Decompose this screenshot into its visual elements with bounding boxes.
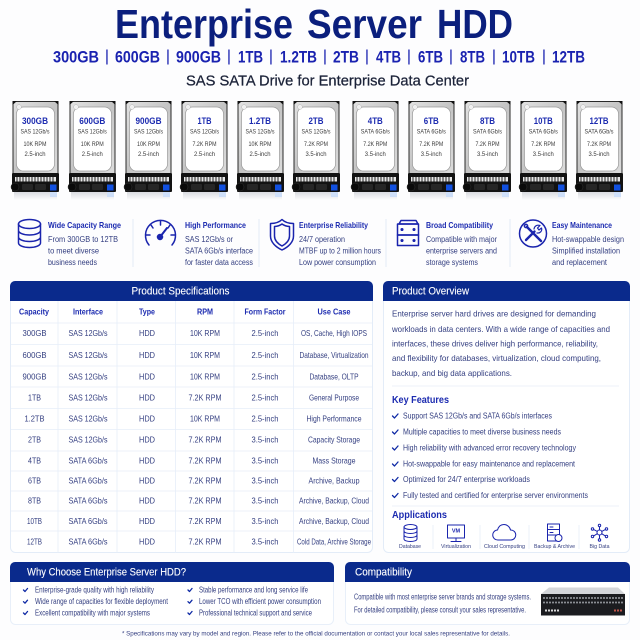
row: 2TB: Capacity Storage bbox=[308, 436, 360, 444]
table column headings: Type bbox=[139, 308, 155, 316]
why choose bullets: Professional technical support and service bbox=[199, 608, 312, 618]
app: virtualization: VM bbox=[452, 528, 461, 534]
row: 4TB: Mass Storage bbox=[312, 456, 356, 466]
drive: 4TB: 3.5-inch bbox=[365, 152, 386, 158]
overview paragraph bbox=[391, 309, 610, 378]
why choose bullets: Excellent compatibility with major systems bbox=[35, 608, 150, 618]
capacity range line: 12TB bbox=[552, 48, 585, 66]
drive: 300GB: 2.5-inch bbox=[24, 152, 46, 158]
drive: 1TB: SAS 12Gb/s bbox=[190, 130, 219, 136]
drive: 10TB bbox=[519, 101, 567, 200]
drive: 10TB: 7.2K RPM bbox=[531, 142, 555, 148]
overview paragraph: backup, and big data applications. bbox=[392, 368, 512, 378]
row: 2TB: SAS 12Gb/s bbox=[68, 436, 108, 444]
app: big data: Big Data bbox=[590, 544, 610, 550]
row: 1TB bbox=[28, 394, 359, 402]
drive: 4TB: SATA 6Gb/s bbox=[361, 130, 390, 136]
row: 600GB: HDD bbox=[139, 351, 155, 360]
drive: 12TB bbox=[575, 101, 623, 200]
row: 10TB: 7.2K RPM bbox=[188, 517, 222, 526]
drive: 12TB: 7.2K RPM bbox=[587, 142, 611, 148]
row: 300GB: 2.5-inch bbox=[252, 329, 279, 338]
drive: 2TB: 2TB bbox=[308, 115, 324, 126]
why choose bullets bbox=[24, 586, 321, 618]
capacity range line: 300GB bbox=[53, 48, 99, 66]
row: 900GB: 900GB bbox=[22, 372, 47, 382]
capacity range line: | bbox=[105, 48, 109, 65]
drive: 6TB: 7.2K RPM bbox=[419, 142, 443, 148]
drive: 6TB: 6TB bbox=[424, 115, 439, 126]
table column headings: Capacity bbox=[19, 308, 49, 316]
row: 4TB: 7.2K RPM bbox=[188, 456, 222, 466]
key features list: Support SAS 12Gb/s and SATA 6Gb/s interfaces bbox=[403, 412, 552, 420]
capacity range line: 1.2TB bbox=[280, 48, 317, 66]
feature: enterprise reliability: Enterprise Reliability bbox=[299, 220, 368, 230]
key features heading: Key Features bbox=[392, 394, 449, 406]
drive: 1.2TB: 1.2TB bbox=[249, 115, 271, 126]
drive: 4TB: 7.2K RPM bbox=[363, 142, 387, 148]
row: 1TB: 1TB bbox=[28, 394, 41, 402]
feature: wide capacity range: From 300GB to 12TB bbox=[48, 235, 118, 244]
row: 1.2TB: 1.2TB bbox=[24, 414, 45, 424]
row: 900GB: 2.5-inch bbox=[252, 372, 279, 382]
drive: 4TB bbox=[351, 101, 399, 200]
row: 900GB: 10K RPM bbox=[190, 372, 220, 382]
feature: broad compatibility bbox=[398, 220, 497, 267]
row: 1.2TB: 2.5-inch bbox=[252, 414, 279, 424]
row: 8TB: 7.2K RPM bbox=[188, 496, 222, 506]
drive: 4TB: 4TB bbox=[368, 115, 383, 126]
feature: high performance: High Performance bbox=[185, 220, 246, 230]
app: virtualization: Virtualization bbox=[441, 544, 471, 550]
row: 6TB: 6TB bbox=[28, 476, 41, 486]
row: 12TB: 3.5-inch bbox=[252, 538, 279, 546]
compatibility header bar bbox=[345, 562, 630, 582]
drive: 10TB: SATA 6Gb/s bbox=[529, 130, 558, 136]
why choose heading: Why Choose Enterprise Server HDD? bbox=[27, 566, 186, 578]
icon: server stack bbox=[398, 220, 418, 246]
row: 10TB bbox=[27, 517, 369, 526]
row: 8TB: SATA 6Gb/s bbox=[68, 496, 108, 506]
drive: 6TB bbox=[407, 101, 455, 200]
title: HDD bbox=[437, 1, 513, 47]
key features list bbox=[392, 412, 588, 500]
capacity range line: 4TB bbox=[376, 48, 401, 66]
feature: broad compatibility: enterprise servers and bbox=[426, 246, 497, 256]
app: big data bbox=[590, 524, 610, 550]
feature: easy maintenance bbox=[520, 220, 624, 267]
row: 6TB: Archive, Backup bbox=[308, 476, 360, 486]
capacity range line: | bbox=[227, 48, 231, 65]
why choose bullets: Wide range of capacities for flexible deployment bbox=[35, 597, 169, 606]
row: 8TB: Archive, Backup, Cloud bbox=[299, 496, 369, 506]
overview paragraph: Enterprise server hard drives are designed for demanding bbox=[392, 309, 596, 319]
app: database: Database bbox=[399, 544, 421, 550]
app: cloud computing bbox=[484, 524, 525, 550]
overview paragraph: interfaces, these drives deliver high performance, reliability, bbox=[392, 338, 598, 348]
capacity range line: | bbox=[166, 48, 170, 65]
drive: 8TB: 7.2K RPM bbox=[476, 142, 500, 148]
feature: easy maintenance: Easy Maintenance bbox=[552, 220, 612, 230]
why choose bullets: Enterprise-grade quality with high reliability bbox=[35, 586, 154, 594]
drive: 900GB bbox=[124, 101, 172, 200]
capacity range line: 8TB bbox=[460, 48, 485, 66]
row: 1.2TB: SAS 12Gb/s bbox=[68, 414, 108, 424]
row: 2TB: 3.5-inch bbox=[252, 436, 279, 444]
row: 4TB: 4TB bbox=[28, 456, 41, 466]
drive: 1TB: 2.5-inch bbox=[194, 152, 215, 158]
feature: broad compatibility: Broad Compatibility bbox=[426, 220, 493, 230]
row: 10TB: 3.5-inch bbox=[252, 517, 279, 526]
drive row bbox=[11, 101, 623, 200]
row: 10TB: SATA 6Gb/s bbox=[68, 517, 108, 526]
drive: 1TB: 7.2K RPM bbox=[192, 142, 217, 148]
row: 900GB: Database, OLTP bbox=[310, 372, 359, 382]
table column headings: RPM bbox=[197, 308, 213, 316]
drive: 8TB: 3.5-inch bbox=[477, 152, 498, 158]
applications row bbox=[399, 524, 610, 550]
table heading: Product Specifications bbox=[132, 286, 230, 298]
capacity range line: 6TB bbox=[418, 48, 443, 66]
app: backup and archive bbox=[534, 524, 575, 550]
row: 1TB: 2.5-inch bbox=[252, 394, 279, 402]
row: 600GB: Database, Virtualization bbox=[300, 351, 369, 360]
feature: enterprise reliability: MTBF up to 2 million hours bbox=[299, 246, 381, 256]
row: 1.2TB: High Performance bbox=[306, 414, 362, 424]
drive: 2TB bbox=[292, 101, 340, 200]
app: database bbox=[399, 524, 421, 550]
compatibility heading: Compatibility bbox=[355, 566, 412, 578]
feature: high performance bbox=[146, 220, 253, 267]
key features list: Multiple capacities to meet diverse business needs bbox=[403, 428, 561, 436]
app: cloud computing: Cloud Computing bbox=[484, 544, 525, 550]
capacity range line: | bbox=[365, 48, 369, 65]
table column headings: Form Factor bbox=[244, 308, 286, 316]
row: 300GB: SAS 12Gb/s bbox=[68, 329, 108, 338]
row: 10TB: 10TB bbox=[27, 517, 42, 526]
row: 4TB bbox=[28, 456, 356, 466]
drive: 1.2TB bbox=[236, 101, 284, 200]
drive: 900GB: 10K RPM bbox=[137, 142, 160, 148]
drive: 6TB: 3.5-inch bbox=[421, 152, 442, 158]
row: 1TB: SAS 12Gb/s bbox=[68, 394, 108, 402]
capacity range line: 1TB bbox=[238, 48, 263, 66]
row: 1TB: HDD bbox=[139, 394, 155, 402]
row: 600GB: SAS 12Gb/s bbox=[68, 351, 108, 360]
table column headings bbox=[19, 308, 351, 316]
icon: tools bbox=[520, 220, 546, 247]
row: 10TB: HDD bbox=[139, 517, 155, 526]
key features list: Optimized for 24/7 enterprise workloads bbox=[403, 475, 530, 484]
subtitle: SAS SATA Drive for Enterprise Data Center bbox=[186, 72, 469, 90]
row: 6TB: 7.2K RPM bbox=[188, 476, 222, 486]
drive: 300GB bbox=[11, 101, 59, 200]
drive: 2TB: 7.2K RPM bbox=[304, 142, 328, 148]
row: 900GB: SAS 12Gb/s bbox=[68, 372, 108, 382]
table header bar bbox=[10, 281, 373, 301]
drive: 1.2TB: SAS 12Gb/s bbox=[246, 130, 274, 136]
row: 1.2TB: 10K RPM bbox=[190, 414, 220, 424]
row: 12TB: Cold Data, Archive Storage bbox=[297, 538, 371, 546]
row: 600GB bbox=[22, 351, 369, 360]
overview header bar bbox=[383, 281, 630, 301]
feature: easy maintenance: Simplified installation bbox=[552, 246, 620, 256]
row: 600GB: 10K RPM bbox=[190, 351, 220, 360]
drive: 300GB: 10K RPM bbox=[24, 142, 46, 148]
feature: high performance: for faster data access bbox=[185, 258, 253, 267]
capacity range line: 2TB bbox=[333, 48, 359, 66]
capacity range line: | bbox=[407, 48, 411, 65]
feature: broad compatibility: storage systems bbox=[426, 258, 478, 267]
drive: 600GB: SAS 12Gb/s bbox=[78, 130, 107, 136]
row: 300GB: HDD bbox=[139, 329, 155, 338]
feature: wide capacity range bbox=[18, 220, 121, 267]
feature: enterprise reliability bbox=[270, 220, 381, 267]
title: Server bbox=[307, 1, 422, 47]
row: 300GB: 300GB bbox=[22, 329, 47, 338]
feature: easy maintenance: Hot-swappable design bbox=[552, 235, 624, 244]
drive: 600GB: 600GB bbox=[79, 115, 105, 126]
panel: compatibility bbox=[345, 562, 630, 624]
row: 2TB: HDD bbox=[139, 436, 155, 444]
feature: broad compatibility: Compatible with major bbox=[426, 235, 497, 244]
row: 2TB: 2TB bbox=[28, 436, 41, 444]
row: 2TB: 7.2K RPM bbox=[188, 436, 222, 444]
row: 2TB bbox=[28, 436, 360, 444]
footnote: * Specifications may vary by model and region. Please refer to the official documentation or contact your local sales representative for details. bbox=[122, 630, 510, 638]
drive: 6TB: SATA 6Gb/s bbox=[417, 130, 446, 136]
row: 8TB bbox=[28, 496, 369, 506]
icon: shield bbox=[270, 220, 294, 250]
drive: 300GB: 300GB bbox=[22, 115, 48, 126]
drive: 600GB: 2.5-inch bbox=[82, 152, 103, 158]
key features list: High reliability with advanced error recovery technology bbox=[403, 444, 576, 452]
capacity range line: 900GB bbox=[176, 48, 221, 66]
row: 4TB: HDD bbox=[139, 456, 155, 466]
feature: high performance: SATA 6Gb/s interface bbox=[185, 246, 253, 256]
row: 10TB: Archive, Backup, Cloud bbox=[299, 517, 369, 526]
drive: 8TB: SATA 6Gb/s bbox=[473, 130, 502, 136]
key features list: Hot-swappable for easy maintenance and replacement bbox=[403, 460, 576, 468]
drive: 1.2TB: 10K RPM bbox=[248, 142, 272, 148]
overview paragraph: and flexibility for databases, virtualization, cloud computing, bbox=[392, 353, 601, 363]
row: 6TB: 3.5-inch bbox=[252, 476, 279, 486]
overview paragraph: workloads in data centers. With a wide range of capacities and bbox=[391, 324, 610, 334]
row: 900GB: HDD bbox=[139, 372, 155, 382]
row: 12TB: HDD bbox=[139, 538, 155, 546]
panel: why choose bbox=[10, 562, 334, 624]
row: 12TB: 7.2K RPM bbox=[188, 538, 222, 546]
row: 8TB: HDD bbox=[139, 496, 155, 506]
row: 600GB: 2.5-inch bbox=[252, 351, 279, 360]
drive: 300GB: SAS 12Gb/s bbox=[20, 130, 50, 136]
row: 6TB bbox=[28, 476, 360, 486]
row: 4TB: 3.5-inch bbox=[252, 456, 279, 466]
row: 8TB: 8TB bbox=[28, 496, 41, 506]
feature: wide capacity range: Wide Capacity Range bbox=[48, 220, 121, 230]
drive: 600GB: 10K RPM bbox=[81, 142, 104, 148]
table column headings: Use Case bbox=[318, 308, 351, 316]
panel: product specifications bbox=[10, 281, 373, 553]
feature: high performance: SAS 12Gb/s or bbox=[185, 235, 233, 244]
feature: wide capacity range: business needs bbox=[48, 258, 97, 267]
capacity range line: | bbox=[449, 48, 453, 65]
table column headings: Interface bbox=[73, 308, 103, 316]
app: backup and archive: Backup & Archive bbox=[534, 544, 575, 550]
row: 300GB bbox=[22, 329, 367, 338]
drive: 10TB: 10TB bbox=[534, 115, 553, 126]
feature: enterprise reliability: 24/7 operation bbox=[299, 235, 345, 244]
icon: rack server bbox=[541, 588, 625, 616]
row: 300GB: 10K RPM bbox=[190, 329, 220, 338]
title: Enterprise bbox=[115, 1, 293, 47]
capacity range line: | bbox=[492, 48, 496, 65]
feature strip bbox=[18, 219, 624, 267]
feature: enterprise reliability: Low power consumption bbox=[299, 258, 376, 267]
app: virtualization bbox=[441, 525, 471, 550]
row: 6TB: HDD bbox=[139, 476, 155, 486]
row: 1TB: General Purpose bbox=[309, 394, 359, 402]
feature: easy maintenance: and replacement bbox=[552, 258, 608, 267]
drive: 12TB: 3.5-inch bbox=[588, 152, 610, 158]
why choose header bar bbox=[10, 562, 334, 582]
row: 12TB: 12TB bbox=[27, 538, 42, 546]
capacity range line: 10TB bbox=[502, 48, 535, 66]
drive: 900GB: SAS 12Gb/s bbox=[134, 130, 163, 136]
drive: 2TB: SAS 12Gb/s bbox=[302, 130, 330, 136]
capacity range line: | bbox=[269, 48, 273, 65]
feature: wide capacity range: to meet diverse bbox=[48, 246, 99, 256]
compatibility text: Compatible with most enterprise server brands and storage systems. bbox=[354, 592, 531, 602]
row: 300GB: OS, Cache, High IOPS bbox=[301, 329, 367, 338]
capacity range line: | bbox=[323, 48, 327, 65]
drive: 12TB: SATA 6Gb/s bbox=[584, 130, 614, 136]
title bbox=[115, 1, 513, 47]
capacity range line: | bbox=[542, 48, 546, 65]
overview heading: Product Overview bbox=[392, 286, 469, 298]
row: 4TB: SATA 6Gb/s bbox=[68, 456, 108, 466]
drive: 8TB: 8TB bbox=[480, 115, 495, 126]
icon: gauge bbox=[146, 220, 176, 245]
row: 12TB bbox=[27, 538, 371, 546]
row: 12TB: SATA 6Gb/s bbox=[68, 538, 108, 546]
capacity range line: 600GB bbox=[115, 48, 160, 66]
drive: 10TB: 3.5-inch bbox=[533, 152, 554, 158]
drive: 12TB: 12TB bbox=[590, 115, 609, 126]
drive: 1.2TB: 2.5-inch bbox=[250, 152, 270, 158]
row: 1.2TB: HDD bbox=[139, 414, 155, 424]
panel: product overview bbox=[383, 281, 630, 552]
applications heading: Applications bbox=[392, 509, 447, 521]
drive: 600GB bbox=[68, 101, 116, 200]
why choose bullets: Stable performance and long service life bbox=[199, 586, 308, 594]
why choose bullets: Lower TCO with efficient power consumption bbox=[199, 597, 321, 606]
drive: 8TB bbox=[463, 101, 511, 200]
icon: database bbox=[18, 220, 40, 248]
row: 600GB: 600GB bbox=[22, 351, 47, 360]
compatibility text: For detailed compatibility, please consult your sales representative. bbox=[354, 606, 526, 614]
row: 900GB bbox=[22, 372, 359, 382]
compatibility text bbox=[354, 592, 531, 614]
row: 6TB: SATA 6Gb/s bbox=[68, 476, 108, 486]
drive: 1TB bbox=[180, 101, 228, 200]
capacity range line bbox=[53, 48, 585, 66]
key features list: Fully tested and certified for enterprise server environments bbox=[403, 491, 588, 500]
drive: 900GB: 2.5-inch bbox=[138, 152, 159, 158]
drive: 2TB: 3.5-inch bbox=[306, 152, 326, 158]
row: 1.2TB bbox=[24, 414, 362, 424]
drive: 900GB: 900GB bbox=[136, 115, 162, 126]
row: 1TB: 7.2K RPM bbox=[188, 394, 222, 402]
drive: 1TB: 1TB bbox=[198, 115, 212, 126]
row: 8TB: 3.5-inch bbox=[252, 496, 279, 506]
